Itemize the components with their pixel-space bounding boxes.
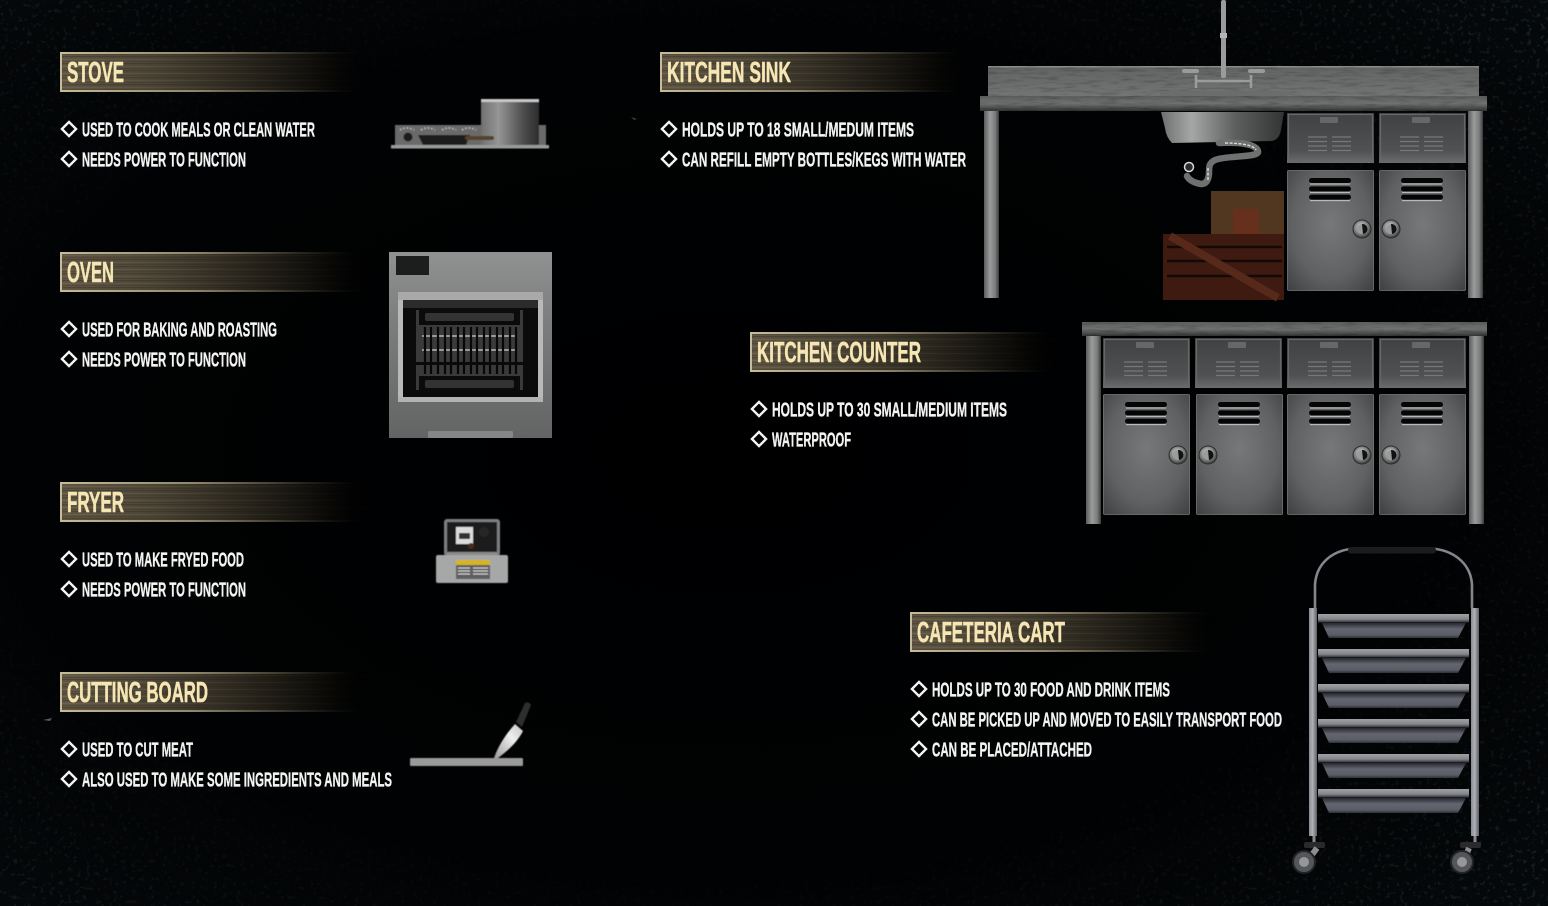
heading: cafeteria cart: CAFETERIA CART [917, 617, 1065, 649]
heading: kitchen counter: KITCHEN COUNTER [757, 337, 921, 369]
illustration: cart [1293, 547, 1481, 873]
icon: cutting board and knife [410, 702, 531, 766]
text: oven features: USED FOR BAKING AND ROASTING [82, 318, 277, 342]
text: stove features: USED TO COOK MEALS OR CLEAN WATER [82, 118, 315, 142]
heading: kitchen sink: KITCHEN SINK [667, 57, 791, 89]
panel: kitchen sink [660, 0, 1487, 300]
icon: fryer [436, 519, 508, 583]
text: stove features: NEEDS POWER TO FUNCTION [82, 148, 246, 172]
heading: fryer: FRYER [67, 487, 124, 519]
text: fryer features [62, 548, 246, 602]
heading: oven: OVEN [67, 257, 114, 289]
heading: stove [60, 52, 370, 92]
text: kitchen sink features [662, 118, 966, 172]
heading: cutting board [60, 672, 370, 712]
text: cafeteria cart features: CAN BE PLACED/ATTACHED [932, 738, 1092, 762]
text: cafeteria cart features [912, 678, 1282, 762]
text: cutting board features: USED TO CUT MEAT [82, 738, 193, 762]
heading: cafeteria cart [910, 612, 1220, 652]
text: kitchen sink features: CAN REFILL EMPTY BOTTLES/KEGS WITH WATER [682, 148, 966, 172]
text: cutting board features [62, 738, 392, 792]
panel: stove [60, 52, 549, 172]
illustration: sink unit [980, 0, 1487, 300]
panel: oven [60, 252, 552, 438]
heading: oven [60, 252, 370, 292]
panel: cafeteria cart [910, 547, 1481, 873]
panel: cutting board [60, 672, 531, 792]
text: oven features [62, 318, 277, 372]
panel: kitchen counter [750, 322, 1487, 524]
text: fryer features: USED TO MAKE FRYED FOOD [82, 548, 244, 572]
text: fryer features: NEEDS POWER TO FUNCTION [82, 578, 246, 602]
icon: stove with pot and pan [391, 99, 549, 148]
heading: kitchen sink [660, 52, 970, 92]
heading: stove: STOVE [67, 57, 124, 89]
heading: cutting board: CUTTING BOARD [67, 677, 208, 709]
text: kitchen counter features: HOLDS UP TO 30 SMALL/MEDIUM ITEMS [772, 398, 1007, 422]
text: oven features: NEEDS POWER TO FUNCTION [82, 348, 246, 372]
text: kitchen counter features: WATERPROOF [772, 428, 851, 452]
heading: fryer [60, 482, 370, 522]
panel: fryer [60, 482, 508, 602]
text: cutting board features: ALSO USED TO MAKE SOME INGREDIENTS AND MEALS [82, 768, 392, 792]
icon: oven [389, 252, 552, 438]
illustration: counter unit [1082, 322, 1487, 524]
text: cafeteria cart features: HOLDS UP TO 30 FOOD AND DRINK ITEMS [932, 678, 1170, 702]
text: stove features [62, 118, 315, 172]
text: kitchen counter features [752, 398, 1007, 452]
text: kitchen sink features: HOLDS UP TO 18 SMALL/MEDUM ITEMS [682, 118, 914, 142]
